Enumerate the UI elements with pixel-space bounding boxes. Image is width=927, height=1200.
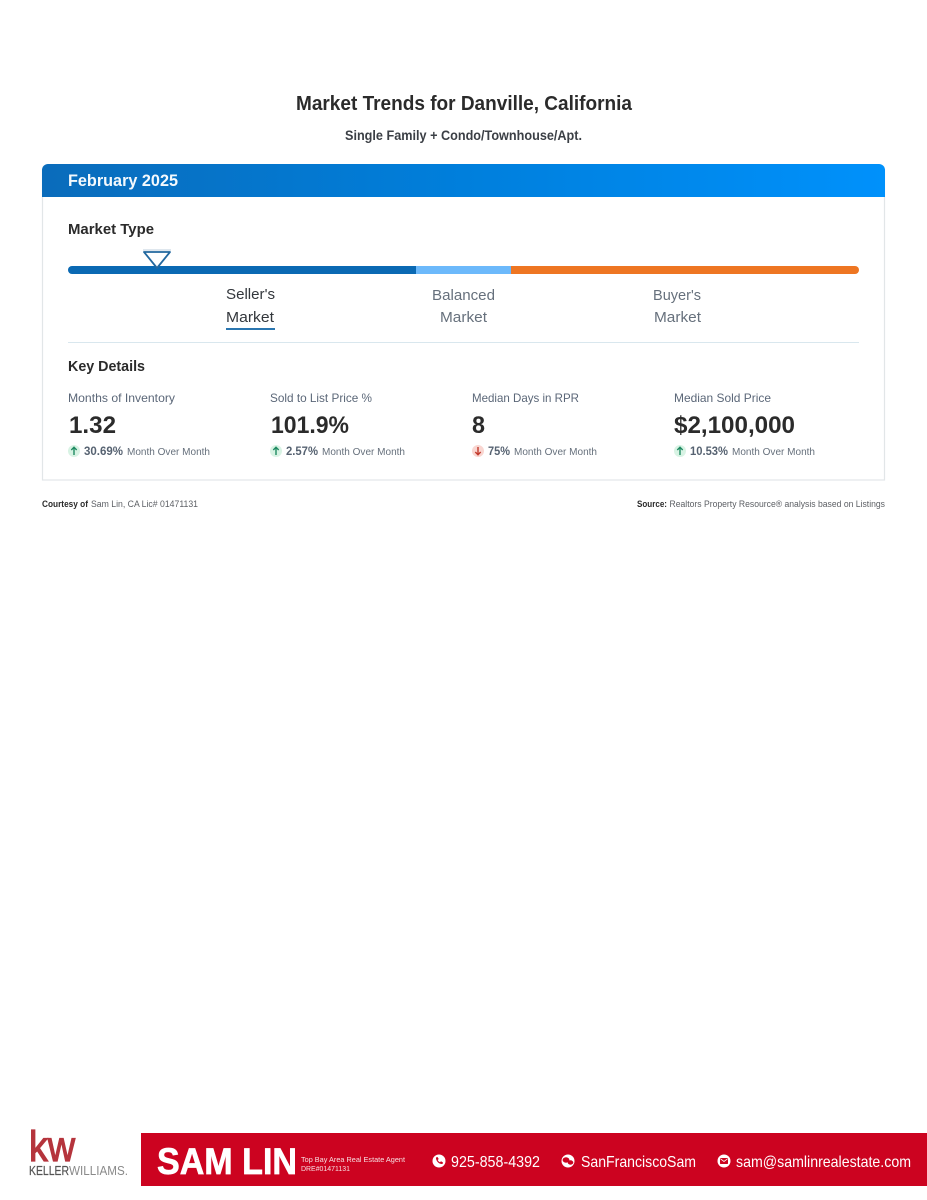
courtesy note: Sam Lin, CA Lic# 01471131: [91, 499, 198, 509]
phone number: 925-858-4392: [451, 1154, 540, 1171]
panel: market card: [42, 164, 885, 480]
icon: wechat: [562, 1154, 574, 1168]
metric: median sold price: [674, 391, 815, 458]
metric: months of inventory: Month Over Month: [127, 446, 210, 458]
label: seller's market: [226, 286, 275, 330]
agent name: SAM LIN: [157, 1141, 297, 1182]
agent tagline: DRE#01471131: [301, 1164, 350, 1173]
metric: median days in rpr: 8: [472, 412, 485, 439]
courtesy note: Courtesy of: [42, 499, 89, 509]
label: seller's market: Seller's: [226, 286, 275, 303]
metric: median days in rpr: Month Over Month: [514, 446, 597, 458]
icon: email: [718, 1154, 730, 1168]
subtitle: Single Family + Condo/Townhouse/Apt.: [345, 127, 582, 143]
metric: median days in rpr: [472, 391, 597, 458]
agent tagline: Top Bay Area Real Estate Agent: [301, 1155, 406, 1164]
metric: sold to list price: [270, 391, 405, 458]
metric: months of inventory: [68, 391, 210, 458]
metric: median sold price: Month Over Month: [732, 446, 815, 458]
label: balanced market: Balanced: [432, 287, 495, 304]
label: buyer's market: Buyer's: [653, 287, 701, 304]
logo: keller williams: KELLER: [29, 1163, 69, 1178]
courtesy note: [42, 499, 198, 509]
label: balanced market: Market: [440, 309, 488, 326]
card header band: [42, 164, 885, 197]
metric: sold to list price: 101.9%: [271, 412, 349, 439]
logo: keller williams: kw: [29, 1123, 76, 1171]
metric: median sold price: $2,100,000: [674, 412, 795, 439]
metric: sold to list price: 2.57%: [286, 444, 318, 458]
metric: median days in rpr: 75%: [488, 444, 510, 458]
source note: Source:: [637, 499, 667, 509]
metric: months of inventory: Months of Inventory: [68, 391, 175, 405]
wechat handle: SanFranciscoSam: [581, 1154, 696, 1171]
metric: median sold price: Median Sold Price: [674, 391, 771, 405]
metric: months of inventory: 1.32: [69, 412, 116, 439]
header date: February 2025: [68, 171, 178, 190]
source note: Realtors Property Resource® analysis based on Listings: [670, 499, 885, 509]
icon: market position marker: [143, 250, 171, 268]
metric: median days in rpr: Median Days in RPR: [472, 391, 579, 405]
label: buyer's market: [653, 287, 702, 326]
metric: sold to list price: Sold to List Price %: [270, 391, 372, 405]
metric: sold to list price: Month Over Month: [322, 446, 405, 458]
label: seller's market: Market: [226, 309, 275, 326]
footer contact band: [141, 1133, 927, 1186]
heading: market type: Market Type: [68, 221, 154, 238]
label: balanced market: [432, 287, 495, 326]
title: Market Trends for Danville, California: [296, 93, 633, 115]
metric: median sold price: 10.53%: [690, 444, 728, 458]
label: buyer's market: Market: [654, 309, 702, 326]
agent tagline: [301, 1155, 406, 1173]
logo: keller williams: WILLIAMS.: [69, 1163, 128, 1178]
icon: phone: [432, 1154, 446, 1168]
market type scale bar: [68, 266, 859, 274]
metric: months of inventory: 30.69%: [84, 444, 123, 458]
heading: key details: Key Details: [68, 358, 145, 375]
logo: keller williams: [29, 1123, 128, 1178]
